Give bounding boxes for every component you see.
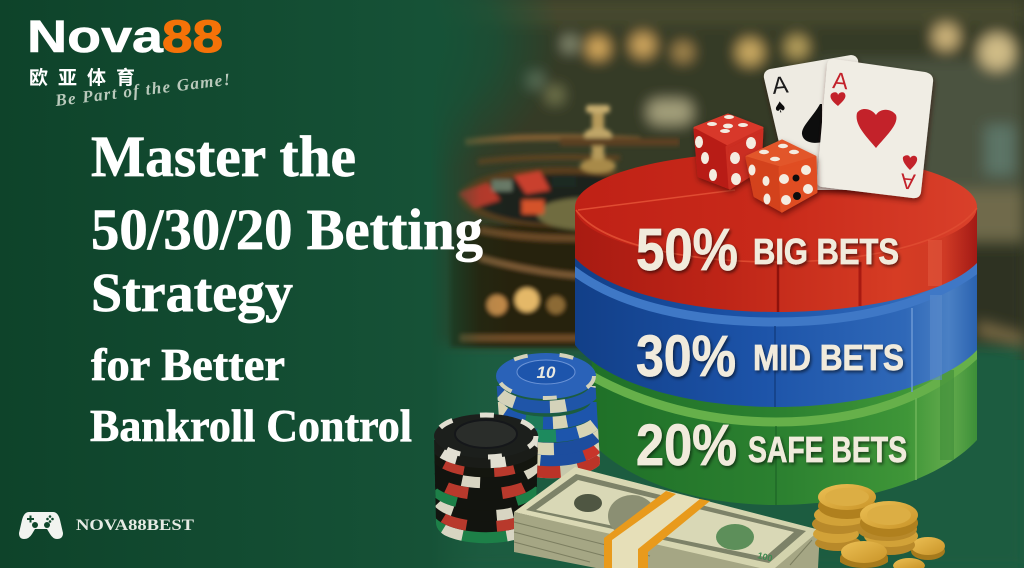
background: casino underlay <box>430 0 1024 568</box>
top chip <box>434 414 538 458</box>
label: 50% big bets: 50% <box>636 217 738 283</box>
gold coins <box>812 484 945 568</box>
coin stack left <box>812 484 876 551</box>
title line 5: Bankroll Control <box>90 400 412 451</box>
cash bundle <box>514 467 820 568</box>
label: 50% big bets: BIG BETS <box>753 231 899 272</box>
pie stack <box>570 152 985 505</box>
title line 4: for Better <box>91 340 285 390</box>
card: ace of hearts <box>817 59 933 198</box>
footer brand <box>19 512 194 539</box>
background: table edge <box>977 320 1024 347</box>
die one <box>695 115 762 188</box>
die two <box>747 141 816 211</box>
logo <box>27 11 231 110</box>
top chip: 10 <box>537 363 556 382</box>
logo number: 88 <box>162 11 223 62</box>
background: green haze top left of scene <box>430 0 560 170</box>
paper band <box>608 492 708 568</box>
title <box>90 124 483 451</box>
title line 2: 50/30/20 Betting <box>91 197 483 262</box>
icon: playing cards <box>764 55 933 198</box>
coin right <box>911 537 945 560</box>
tier: green safe bets <box>585 340 985 505</box>
label: 30% mid bets: MID BETS <box>753 337 904 378</box>
logo chinese name: 欧亚体育 <box>29 66 145 89</box>
title line 1: Master the <box>91 124 356 189</box>
icon: game controller <box>19 512 63 539</box>
title line 3: Strategy <box>91 262 293 323</box>
background: roulette wheel <box>450 105 680 347</box>
card: ace of spades: ♠ <box>773 98 788 117</box>
label: 20% safe bets: SAFE BETS <box>748 429 907 470</box>
coin stack centre <box>857 501 918 555</box>
card: ace of spades: A <box>771 71 790 100</box>
label: 20% safe bets <box>636 413 907 478</box>
background: fade into green panel <box>0 0 600 568</box>
label: 50% big bets <box>636 217 899 283</box>
chip stack: black <box>434 414 538 537</box>
icon: dice <box>695 115 816 211</box>
footer handle: NOVA88BEST <box>76 517 194 534</box>
label: 30% mid bets <box>636 324 904 389</box>
tier: blue mid bets <box>575 258 977 407</box>
card: ace of hearts: A <box>832 67 850 94</box>
logo wordmark: Nova <box>27 11 164 62</box>
card: ace of hearts: A <box>899 168 916 195</box>
background: blurred casino bokeh <box>430 0 1024 568</box>
tier: red big bets <box>575 152 977 312</box>
card: ace of spades <box>764 55 870 190</box>
coin front <box>840 541 925 568</box>
chip stack: blue <box>496 353 600 472</box>
label: 20% safe bets: 20% <box>636 413 737 478</box>
label: 30% mid bets: 30% <box>636 324 736 389</box>
cash bundle: 100 <box>757 550 774 564</box>
logo tagline: Be Part of the Game! <box>53 70 231 110</box>
